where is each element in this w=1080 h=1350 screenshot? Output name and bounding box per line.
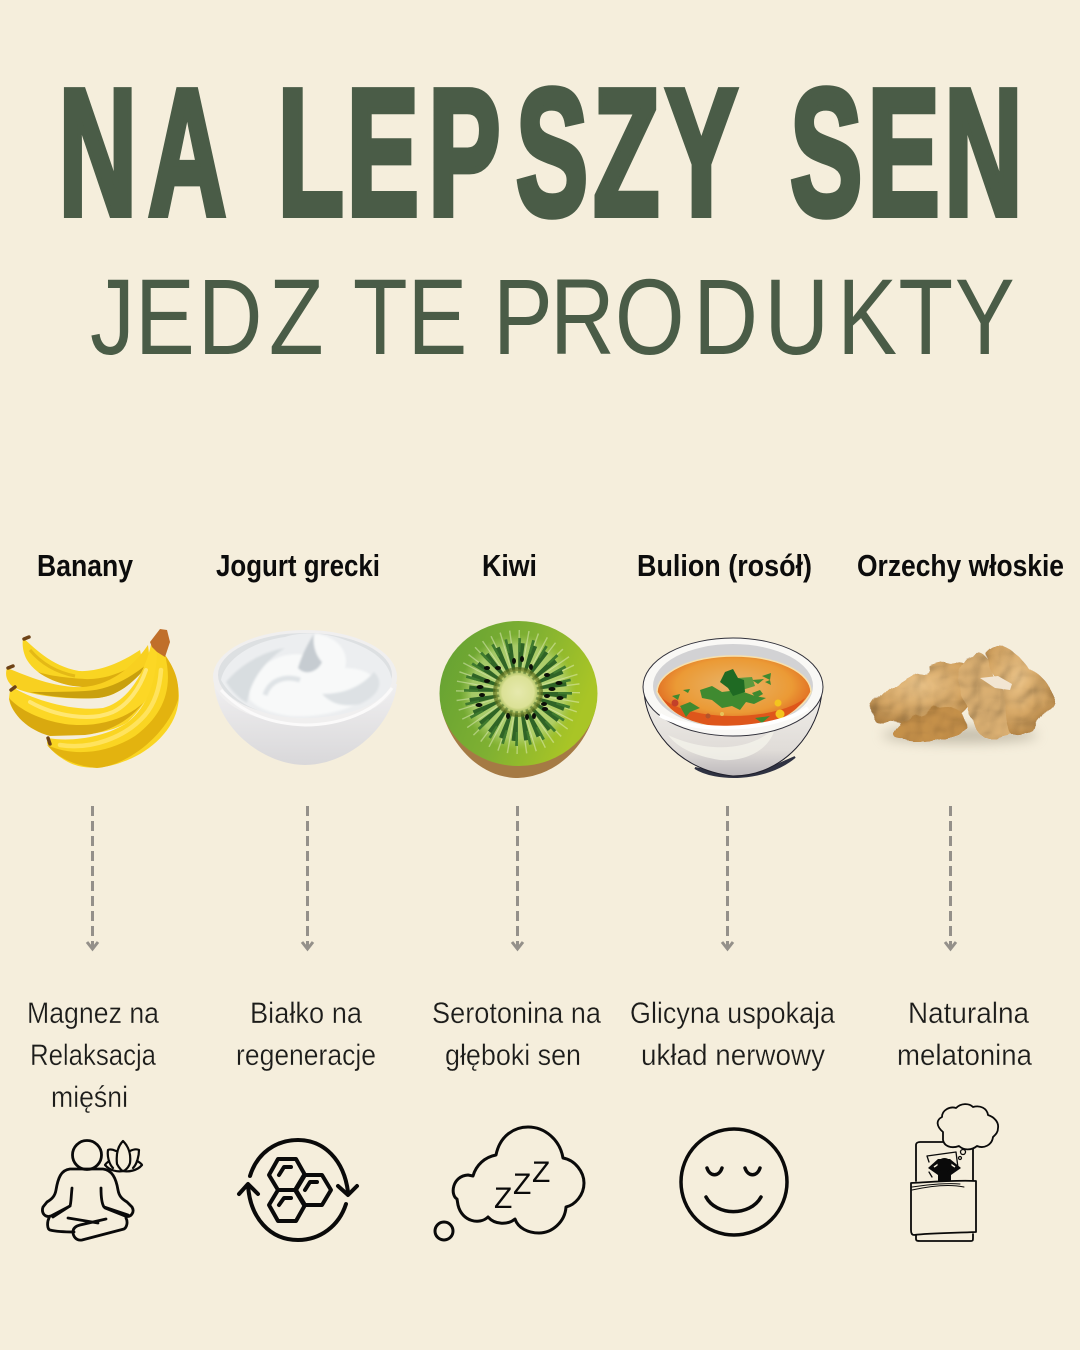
image: yogurt bowl bbox=[213, 630, 397, 765]
text: glicyna bbox=[630, 997, 835, 1072]
column: kiwi bbox=[432, 548, 601, 1240]
arrow bbox=[722, 806, 733, 949]
column: broth bbox=[630, 548, 835, 1235]
heading: Banany: Banany bbox=[37, 548, 134, 583]
arrow bbox=[512, 806, 523, 949]
heading: Jogurt grecki: Jogurt grecki bbox=[216, 548, 380, 583]
text: glicyna: Glicyna uspokaja bbox=[630, 997, 835, 1030]
heading: Bulion (rosół): Bulion (rosół) bbox=[637, 548, 812, 583]
icon: smiling face bbox=[681, 1129, 787, 1235]
text: magnez bbox=[27, 997, 159, 1114]
subtitle: JEDZ TE PRODUKTY bbox=[90, 257, 1015, 378]
image: kiwi half bbox=[440, 621, 598, 778]
text: magnez: Magnez na bbox=[27, 997, 159, 1030]
text: glicyna: układ nerwowy bbox=[641, 1039, 825, 1072]
text: magnez: Relaksacja bbox=[30, 1039, 156, 1072]
icon: person sleeping in bed with dream cloud bbox=[911, 1104, 998, 1241]
icon: meditating person with lotus bbox=[42, 1140, 142, 1240]
icon: sleep cloud zzz: Z bbox=[494, 1182, 512, 1215]
arrow bbox=[945, 806, 956, 949]
column: bananas bbox=[6, 548, 179, 1240]
text: melatonina: Naturalna bbox=[908, 997, 1029, 1030]
image: soup bowl bbox=[643, 638, 823, 777]
text: białko bbox=[236, 997, 376, 1072]
icon: hexagons in cycle arrows bbox=[239, 1140, 357, 1240]
arrow bbox=[87, 806, 98, 949]
text: melatonina: melatonina bbox=[897, 1039, 1032, 1072]
arrow bbox=[302, 806, 313, 949]
text: melatonina bbox=[897, 997, 1032, 1072]
icon: sleep cloud zzz: Z bbox=[532, 1156, 550, 1189]
icon: sleep cloud zzz: Z bbox=[513, 1168, 531, 1201]
text: białko: regeneracje bbox=[236, 1039, 376, 1072]
text: serotonina: Serotonina na bbox=[432, 997, 601, 1030]
text: serotonina bbox=[432, 997, 601, 1072]
image: bananas bbox=[6, 629, 179, 768]
heading: Kiwi: Kiwi bbox=[482, 548, 537, 583]
icon: sleep cloud zzz bbox=[435, 1127, 584, 1240]
title: NA LEPSZY SEN bbox=[59, 53, 1022, 253]
text: białko: Białko na bbox=[250, 997, 362, 1030]
image: walnuts bbox=[870, 646, 1053, 743]
column: walnuts bbox=[857, 548, 1064, 1241]
text: serotonina: głęboki sen bbox=[445, 1039, 581, 1072]
text: magnez: mięśni bbox=[51, 1081, 128, 1114]
column: greek yogurt bbox=[213, 548, 397, 1240]
